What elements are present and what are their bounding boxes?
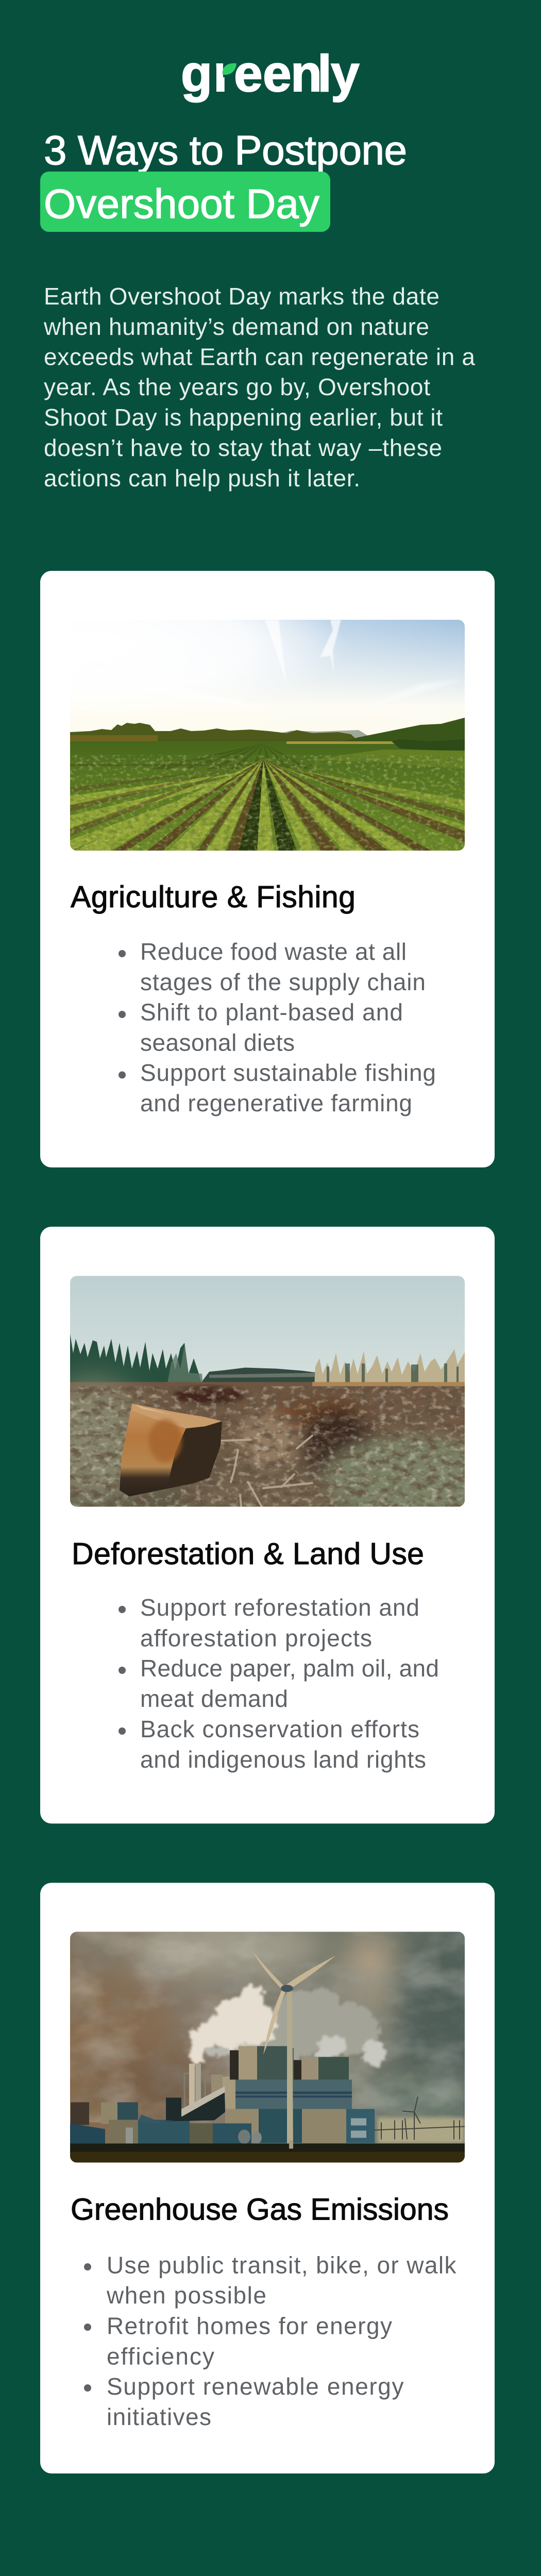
wind turbine — [252, 1951, 336, 2148]
bullet list: agriculture — [119, 938, 436, 1116]
smoke plumes — [188, 1985, 385, 2067]
photo: crop field — [70, 620, 465, 851]
tree stump — [120, 1403, 222, 1496]
heading: Agriculture & Fishing: Agriculture & Fishing — [71, 880, 356, 914]
bullet list: deforestation: meat demand — [140, 1685, 288, 1712]
bullet list: agriculture: Support sustainable fishing — [140, 1059, 436, 1086]
logo: greenly: greenly — [181, 45, 360, 103]
title: 3 Ways to Postpone — [44, 127, 407, 173]
intro text: Earth Overshoot Day marks the date — [44, 283, 439, 310]
intro text: exceeds what Earth can regenerate in a — [44, 343, 475, 370]
bullet list: deforestation: Support reforestation and — [140, 1594, 419, 1621]
distant pylons and turbine — [374, 2097, 465, 2140]
bullet list: deforestation: Back conservation efforts — [140, 1716, 419, 1742]
ground — [70, 2140, 465, 2163]
title highlight: Overshoot Day: Overshoot Day — [44, 181, 319, 227]
panel: deforestation and land use — [40, 1227, 498, 1824]
chimney — [184, 2064, 205, 2109]
intro text: when humanity’s demand on nature — [43, 313, 429, 340]
bullet list: emissions — [84, 2252, 457, 2430]
bullet list: deforestation: afforestation projects — [140, 1625, 372, 1652]
bullet list: emissions: efficiency — [107, 2343, 214, 2370]
icon: green leaf — [223, 63, 236, 75]
bullet list: emissions: Retrofit homes for energy — [107, 2312, 392, 2339]
photo: cleared forest with stump — [70, 1276, 465, 1506]
bullet list: emissions: Use public transit, bike, or walk — [107, 2252, 457, 2279]
bullet list: deforestation: and indigenous land rights — [140, 1746, 426, 1773]
intro text: actions can help push it later. — [44, 465, 360, 492]
intro text: doesn’t have to stay that way –these — [44, 434, 442, 461]
bullet list: agriculture: and regenerative farming — [140, 1090, 412, 1116]
power plant buildings — [70, 2046, 375, 2144]
bullet list: agriculture: seasonal diets — [140, 1029, 295, 1056]
bullet list: agriculture: Shift to plant-based and — [140, 998, 403, 1025]
bullet list: emissions: Support renewable energy — [107, 2373, 404, 2400]
intro text — [43, 283, 475, 492]
conveyor — [166, 2087, 225, 2122]
heading: Greenhouse Gas Emissions: Greenhouse Gas Emissions — [71, 2193, 449, 2227]
heading: Deforestation & Land Use: Deforestation & Land Use — [72, 1537, 424, 1571]
photo: power plant with wind turbine — [70, 1932, 465, 2163]
bullet list: deforestation: Reduce paper, palm oil, and — [140, 1655, 439, 1682]
intro text: year. As the years go by, Overshoot — [44, 374, 430, 400]
bullet list: emissions: initiatives — [107, 2403, 211, 2430]
title — [40, 127, 407, 232]
bullet list: agriculture: stages of the supply chain — [140, 969, 426, 995]
bullet list: deforestation — [119, 1594, 439, 1773]
panel: agriculture and fishing — [40, 571, 495, 1167]
bullet list: emissions: when possible — [106, 2282, 266, 2309]
panel: greenhouse gas emissions — [19, 1883, 495, 2473]
bullet list: agriculture: Reduce food waste at all — [140, 938, 407, 965]
intro text: Shoot Day is happening earlier, but it — [44, 404, 443, 431]
